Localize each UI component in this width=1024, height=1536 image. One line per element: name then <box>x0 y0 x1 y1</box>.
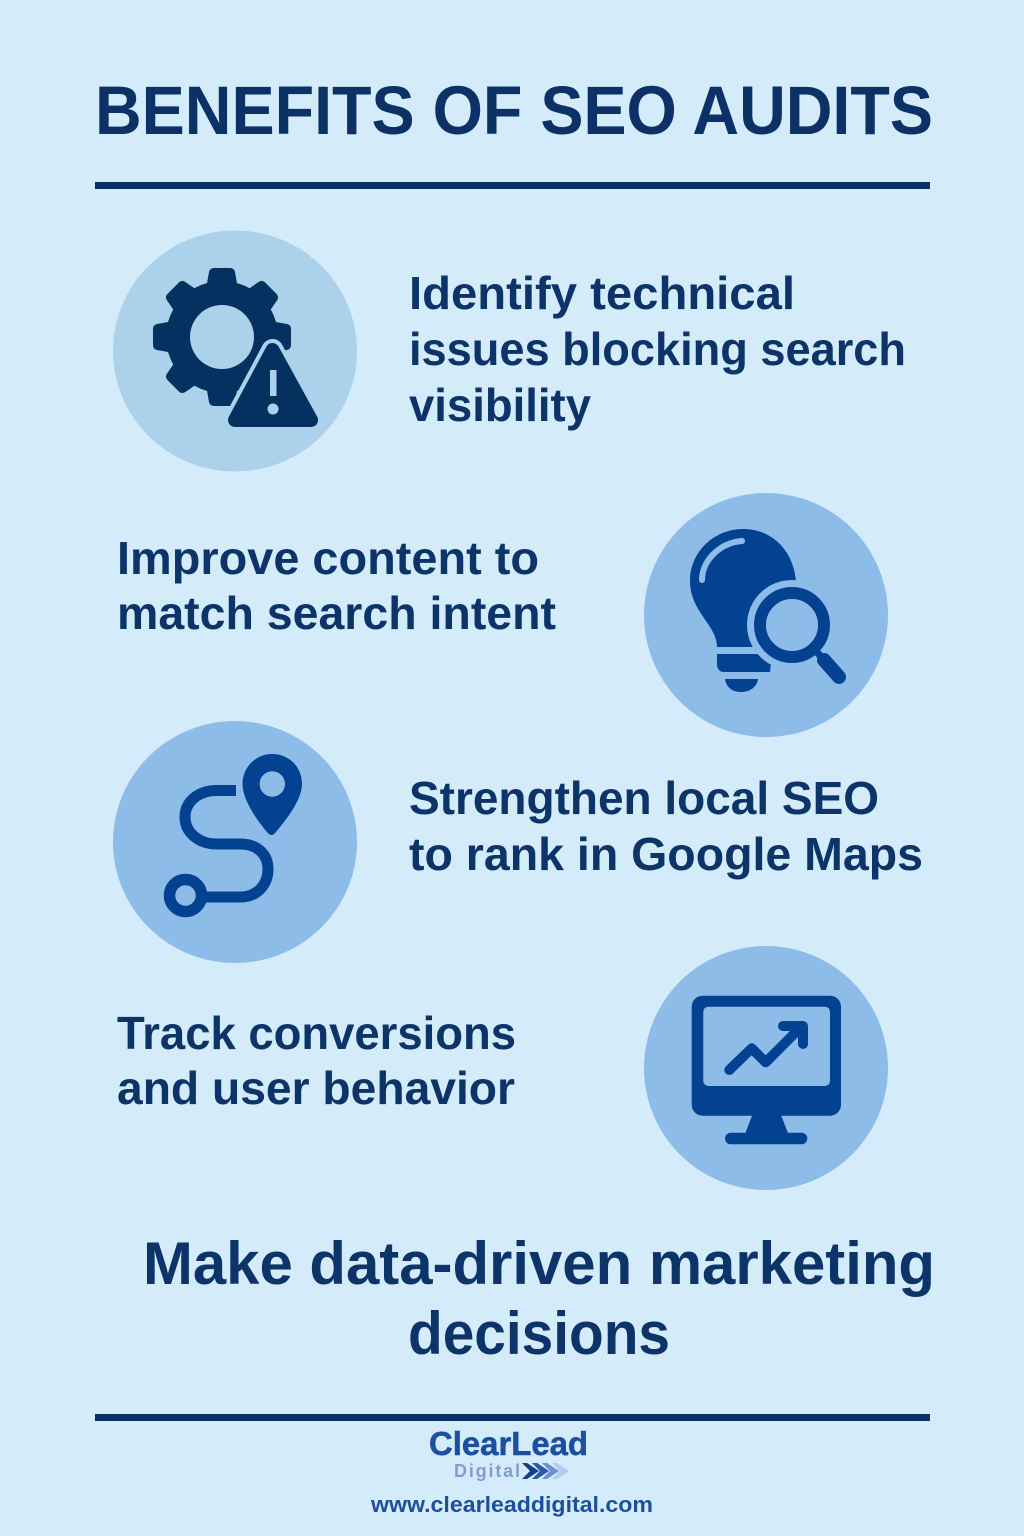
title: BENEFITS OF SEO AUDITS <box>95 72 933 149</box>
text: identify technical issues: visibility <box>409 379 591 431</box>
text: track conversions: and user behavior <box>117 1062 515 1114</box>
logo: ClearLead Digital: ClearLead <box>429 1425 588 1462</box>
closing statement: decisions <box>408 1300 670 1367</box>
icon: light bulb with magnifier <box>644 493 888 737</box>
text: strengthen local SEO: to rank in Google Maps <box>409 828 923 880</box>
text: identify technical issues: Identify technical <box>409 267 795 319</box>
text: improve content: Improve content to <box>117 532 539 584</box>
text: track conversions <box>117 1007 516 1114</box>
logo: ClearLead Digital <box>429 1425 588 1481</box>
closing statement: Make data-driven marketing <box>143 1230 935 1297</box>
panel: improve content <box>117 493 888 737</box>
closing statement <box>143 1230 935 1367</box>
text: identify technical issues <box>409 267 906 431</box>
text: strengthen local SEO: Strengthen local SEO <box>409 772 879 824</box>
text: strengthen local SEO <box>409 772 923 880</box>
panel: track conversions <box>117 946 888 1190</box>
text: improve content: match search intent <box>117 587 556 639</box>
icon: logo chevrons <box>522 1463 569 1479</box>
panel: strengthen local SEO <box>113 721 923 963</box>
panel: identify technical issues <box>113 230 906 472</box>
text: identify technical issues: issues blocking search <box>409 323 906 375</box>
icon: gear with warning triangle <box>113 230 357 472</box>
icon: monitor with growth chart <box>644 946 888 1190</box>
icon: route and map pin <box>113 721 357 963</box>
text: improve content <box>117 532 556 639</box>
text: track conversions: Track conversions <box>117 1007 516 1059</box>
website url: www.clearleaddigital.com <box>370 1492 653 1517</box>
logo: ClearLead Digital: Digital <box>454 1461 520 1481</box>
